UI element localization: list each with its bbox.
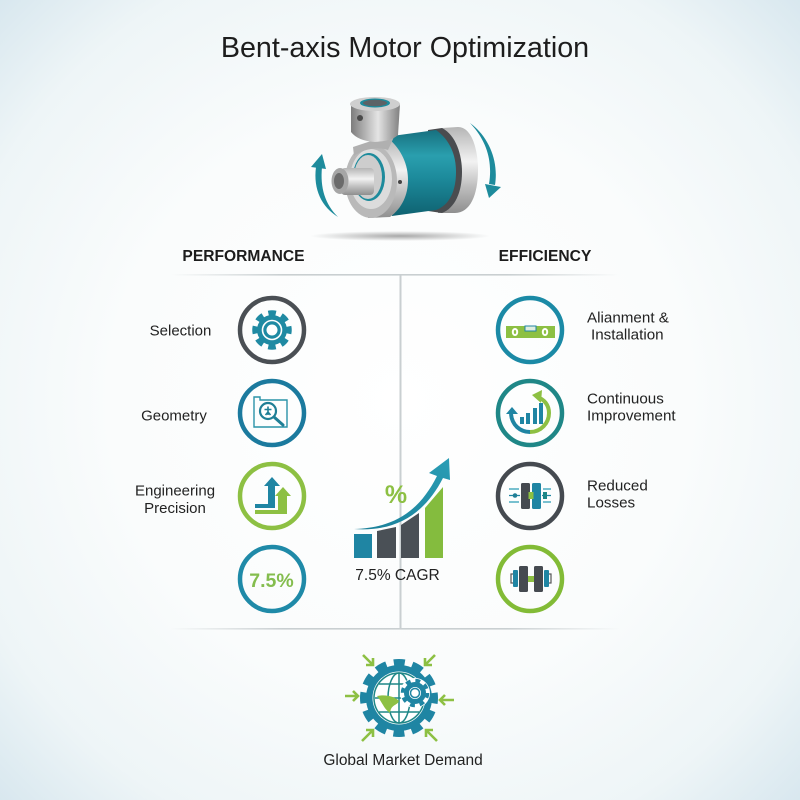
label: reduced losses: Reduced bbox=[587, 478, 648, 495]
bar 4 bbox=[425, 487, 443, 558]
label: engineering precision: Engineering bbox=[135, 483, 215, 500]
bar 1 bbox=[354, 534, 372, 558]
icon: global market gear bbox=[345, 655, 454, 741]
icon: improvement cycle bbox=[498, 381, 562, 445]
icon: rising arrows bbox=[240, 464, 304, 528]
icon: bent-axis motor bbox=[310, 97, 501, 241]
growth arrow bbox=[354, 458, 450, 529]
panel: engineering precision bbox=[135, 464, 304, 528]
panel: continuous improvement bbox=[498, 381, 676, 445]
badge: 7.5% bbox=[240, 547, 304, 611]
icon: magnifier on blueprint bbox=[240, 381, 304, 445]
label: geometry: Geometry bbox=[141, 408, 207, 425]
label: alignment and installation: Alianment & bbox=[587, 310, 669, 327]
panel: reduced losses bbox=[498, 464, 648, 528]
icon: gear bbox=[240, 298, 304, 362]
heading: performance: PERFORMANCE bbox=[182, 248, 305, 265]
panel: selection bbox=[150, 298, 304, 362]
icon: right rotation arrow bbox=[470, 123, 501, 198]
icon: left rotation arrow bbox=[311, 154, 338, 217]
panel: geometry bbox=[141, 381, 304, 445]
icon: spirit level bbox=[498, 298, 562, 362]
chart label: 7.5% CAGR bbox=[355, 567, 440, 584]
label: selection: Selection bbox=[150, 323, 211, 340]
percent symbol: % bbox=[385, 481, 407, 509]
icon: coupling with green ring bbox=[498, 547, 562, 611]
panel: alignment and installation bbox=[498, 298, 669, 362]
title: Bent-axis Motor Optimization bbox=[221, 32, 589, 64]
chart: 7.5% CAGR growth bars bbox=[354, 458, 450, 584]
demand arrows bbox=[345, 655, 454, 741]
heading: efficiency: EFFICIENCY bbox=[499, 248, 592, 265]
bar 2 bbox=[377, 527, 396, 558]
label: reduced losses: Losses bbox=[587, 495, 636, 512]
badge: 7.5%: 7.5% bbox=[249, 570, 294, 592]
icon: coupling plates bbox=[498, 464, 562, 528]
label: continuous improvement: Continuous bbox=[587, 391, 664, 408]
label: engineering precision: Precision bbox=[144, 500, 206, 517]
bar 3 bbox=[401, 513, 419, 558]
label: continuous improvement: Improvement bbox=[587, 408, 676, 425]
label: global market demand: Global Market Demand bbox=[323, 752, 483, 769]
label: alignment and installation: Installation bbox=[591, 327, 664, 344]
